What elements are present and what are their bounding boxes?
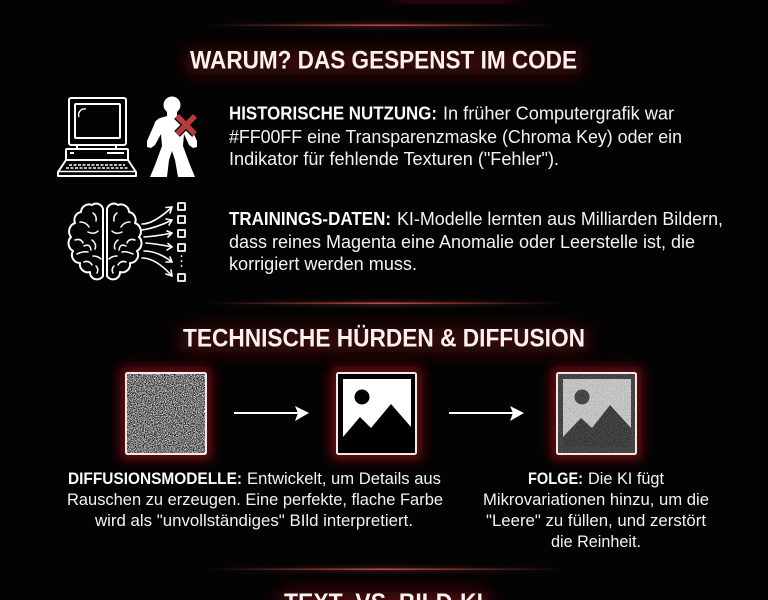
text: historische nutzung: HISTORISCHE NUTZUNG:: [229, 104, 437, 124]
text: trainings-daten: dass reines Magenta eine Anomalie oder Leerstelle ist, die: [229, 232, 695, 252]
text: historische nutzung: #FF00FF eine Transparenzmaske (Chroma Key) oder ein: [229, 127, 682, 147]
text: diffusionsmodelle: wird als "unvollständiges" BIld interpretiert.: [94, 512, 413, 530]
text: diffusionsmodelle: Rauschen zu erzeugen. Eine perfekte, flache Farbe: [67, 491, 443, 509]
divider top: [205, 23, 560, 28]
text: folge: "Leere" zu füllen, und zerstört: [486, 512, 706, 530]
text: folge: [483, 470, 709, 551]
clean image square: [331, 367, 422, 460]
text: historische nutzung: Indikator für fehlende Texturen ("Fehler").: [229, 149, 559, 169]
arrow: noise to image: [234, 406, 309, 421]
text: historische nutzung: In früher Computergrafik war: [443, 104, 674, 124]
noise square: [120, 367, 212, 460]
icon: person with red cross: [147, 96, 197, 177]
text: trainings-daten: [229, 209, 723, 274]
text: historische nutzung: [229, 104, 682, 169]
text: folge: Mikrovariationen hinzu, um die: [483, 491, 709, 509]
text: trainings-daten: KI-Modelle lernten aus Milliarden Bildern,: [397, 209, 723, 229]
text: folge: Die KI fügt: [588, 470, 664, 488]
heading: technische huerden: TECHNISCHE HÜRDEN & DIFFUSION: [183, 324, 585, 352]
panel: warum: [58, 46, 723, 281]
divider middle: [205, 301, 565, 306]
text: diffusionsmodelle: [67, 470, 443, 530]
text: diffusionsmodelle: DIFFUSIONSMODELLE:: [68, 470, 242, 488]
text: folge: die Reinheit.: [551, 533, 641, 551]
icon: brain with data arrows: [69, 203, 185, 281]
panel: technische huerden: [67, 324, 709, 551]
divider bottom: [205, 567, 565, 572]
text: trainings-daten: korrigiert werden muss.: [229, 254, 417, 274]
arrow: image to noisy image: [449, 406, 524, 421]
text: folge: FOLGE:: [528, 470, 583, 488]
heading: warum: WARUM? DAS GESPENST IM CODE: [190, 46, 577, 74]
noisy image square: [551, 367, 642, 460]
text: diffusionsmodelle: Entwickelt, um Details aus: [247, 470, 441, 488]
icon: retro computer: [58, 98, 136, 176]
text: trainings-daten: TRAININGS-DATEN:: [229, 209, 391, 229]
